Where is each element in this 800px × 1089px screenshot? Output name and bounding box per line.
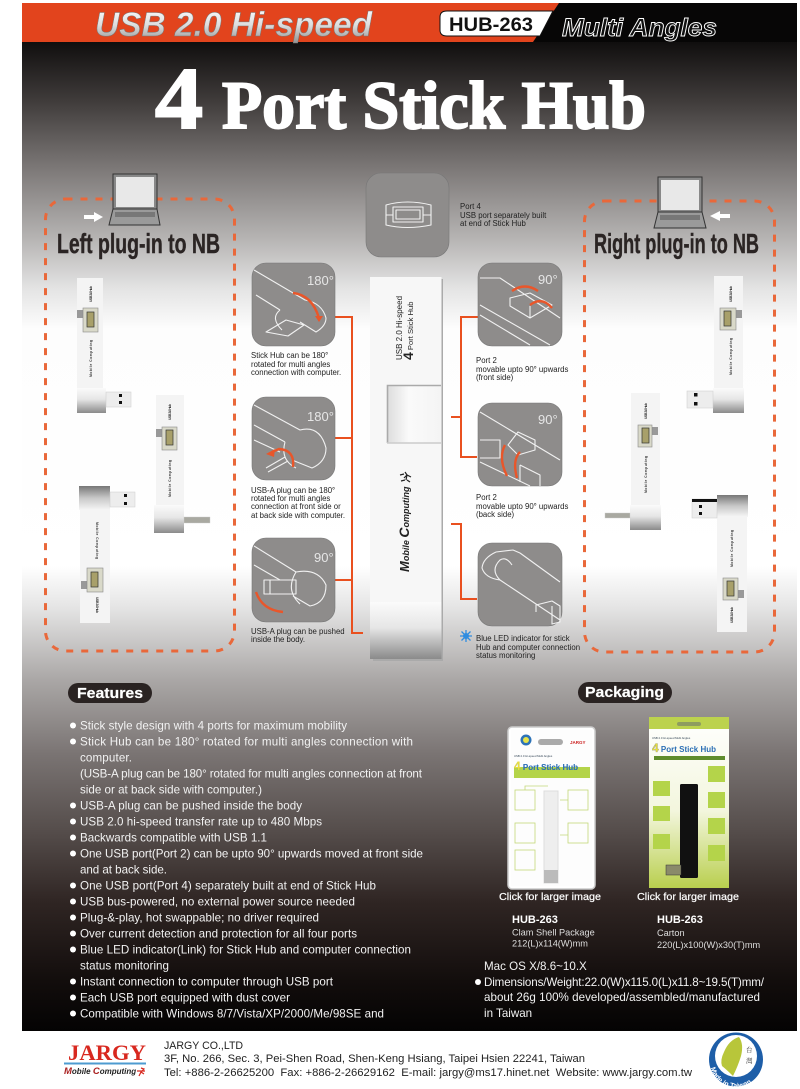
footer logo: Mobile Computing	[64, 1066, 136, 1077]
larger image labels: Click for larger image	[499, 891, 601, 903]
made in Taiwan badge	[709, 1032, 763, 1086]
port 4 caption: at end of Stick Hub	[460, 219, 527, 228]
caption 6: Blue LED indicator for stick	[476, 634, 570, 643]
hub label	[395, 296, 416, 360]
features heading: Features	[77, 685, 143, 702]
caption 2: rotated for multi angles	[251, 494, 330, 503]
caption 1: rotated for multi angles	[251, 360, 330, 369]
clam shell info: 212(L)x114(W)mm	[512, 938, 588, 948]
features list: and at back side.	[80, 864, 167, 876]
callout: LED indicator	[460, 543, 580, 660]
carton package: USB 2.0 Hi-speed Multi Angles	[652, 736, 691, 740]
made in Taiwan badge: 灣	[746, 1056, 753, 1065]
made in Taiwan badge: 台	[746, 1045, 753, 1054]
features list: Over current detection and protection for all four ports	[80, 928, 357, 940]
port 4 caption: USB port separately built	[460, 211, 547, 220]
hub view 5: USB 2.0 Hub	[644, 403, 648, 419]
hub view 3: Mobile Computing	[95, 522, 99, 559]
carton package	[649, 717, 729, 888]
model badge: HUB-263	[449, 15, 533, 36]
carton info	[657, 914, 760, 950]
company details: JARGY CO.,LTD	[164, 1040, 243, 1052]
caption 1: Stick Hub can be 180°	[251, 351, 328, 360]
carton info: HUB-263	[657, 914, 703, 926]
90 degree label: 90°	[314, 550, 334, 565]
company details: 3F, No. 266, Sec. 3, Pei-Shen Road, Shen-Keng Hsiang, Taipei Hsien 22241, Taiwan	[164, 1053, 585, 1065]
caption 2: connection at front side or	[251, 502, 341, 511]
callout: port 2 back	[476, 403, 569, 519]
footer logo: JARGY	[68, 1040, 146, 1065]
caption 4: Port 2	[476, 356, 497, 365]
caption 4: movable upto 90° upwards	[476, 365, 569, 374]
caption 1: connection with computer.	[251, 368, 341, 377]
clam shell package	[508, 727, 595, 889]
company details	[164, 1040, 692, 1079]
features list: Blue LED indicator(Link) for Stick Hub and computer connection	[80, 944, 411, 956]
specs text: Mac OS X/8.6~10.X	[484, 960, 587, 973]
caption 5: movable upto 90° upwards	[476, 502, 569, 511]
larger image labels	[499, 891, 739, 903]
90 degree label: 90°	[538, 272, 558, 287]
hub view 6	[692, 495, 748, 632]
callout: port 2 front	[476, 263, 569, 382]
diagram 4	[480, 278, 560, 345]
main title	[155, 51, 646, 148]
features list: One USB port(Port 2) can be upto 90° upwards moved at front side	[80, 848, 423, 860]
hub label: USB 2.0 Hi-speed	[395, 296, 404, 360]
panel: left plug-in	[46, 174, 234, 651]
features list: computer.	[80, 752, 132, 764]
features list: side or at back side with computer.)	[80, 784, 262, 796]
features list: USB-A plug can be pushed inside the body	[80, 800, 302, 812]
icon: blue LED	[460, 630, 472, 642]
features list	[70, 720, 423, 1020]
callout: USB-A push	[251, 538, 345, 644]
clam shell package: JARGY	[570, 740, 586, 745]
callout: stick hub rotation	[251, 263, 341, 377]
hub view 1: Mobile Computing	[89, 340, 93, 377]
hub label: 4 Port Stick Hub	[400, 302, 416, 360]
main title: 4	[155, 51, 203, 148]
connectors right	[451, 317, 478, 599]
caption 6: status monitoring	[476, 651, 535, 660]
diagram 5	[480, 412, 560, 486]
features list: One USB port(Port 4) separately built at end of Stick Hub	[80, 880, 376, 892]
caption 5: (back side)	[476, 510, 515, 519]
clam shell package: 4 Port Stick Hub	[514, 759, 578, 773]
clam shell package: USB 2.0 Hi-speed Multi Angles	[514, 754, 553, 758]
callout: USB-A rotation	[251, 397, 345, 520]
features list: USB 2.0 hi-speed transfer rate up to 480 Mbps	[80, 816, 322, 828]
caption 3: USB-A plug can be pushed	[251, 627, 345, 636]
features list: Backwards compatible with USB 1.1	[80, 832, 267, 844]
icon: port 4	[386, 202, 431, 228]
panel: port 4 detail	[366, 173, 547, 257]
carton info: 220(L)x100(W)x30(T)mm	[657, 940, 760, 950]
header title: USB 2.0 Hi-speed	[95, 6, 373, 44]
caption 3: inside the body.	[251, 635, 305, 644]
features list: Instant connection to computer through USB port	[80, 976, 334, 988]
specs text: Dimensions/Weight:22.0(W)x115.0(L)x11.8~19.5(T)mm/	[484, 976, 765, 989]
packaging heading: Packaging	[585, 684, 664, 701]
port 4 caption: Port 4	[460, 202, 481, 211]
panel: right plug-in	[584, 177, 774, 652]
caption 2: at back side with computer.	[251, 511, 345, 520]
features heading	[68, 683, 152, 703]
header band	[22, 3, 797, 44]
hub view 5	[605, 393, 661, 530]
features list: Plug-&-play, hot swappable; no driver required	[80, 912, 319, 924]
hub view 3	[79, 486, 135, 623]
footer logo	[64, 1040, 146, 1077]
clam shell info: Clam Shell Package	[512, 928, 595, 938]
features list: USB bus-powered, no external power source needed	[80, 896, 355, 908]
features list: Compatible with Windows 8/7/Vista/XP/2000/Me/98SE and	[80, 1008, 384, 1020]
carton package: 4 Port Stick Hub	[652, 741, 716, 755]
hub view 2	[154, 395, 210, 533]
clam shell info	[512, 914, 595, 948]
main title: Port Stick Hub	[222, 67, 646, 143]
specs text: in Taiwan	[484, 1007, 532, 1020]
diagram 6	[482, 550, 560, 624]
hub view 2: USB 2.0 Hub	[168, 404, 172, 420]
hub view 2: Mobile Computing	[168, 460, 172, 497]
connectors left	[335, 317, 363, 633]
specs text	[475, 960, 765, 1020]
caption 6: Hub and computer connection	[476, 643, 580, 652]
company details: Tel: +886-2-26625200 Fax: +886-2-26629162 E-mail: jargy@ms17.hinet.net Website: www.jargy.com.tw	[164, 1067, 692, 1079]
diagram 1	[254, 270, 326, 336]
hub view 4	[687, 276, 744, 413]
specs text: about 26g 100% developed/assembled/manufactured	[484, 991, 760, 1004]
90 degree label: 90°	[538, 412, 558, 427]
hub view 5: Mobile Computing	[644, 456, 648, 493]
caption 4: (front side)	[476, 373, 514, 382]
carton info: Carton	[657, 928, 685, 938]
clam shell info: HUB-263	[512, 914, 558, 926]
icon: right arrow	[710, 211, 730, 221]
hub view 4: USB 2.0 Hub	[729, 286, 733, 302]
hub view 6: Mobile Computing	[730, 530, 734, 567]
caption 2: USB-A plug can be 180°	[251, 486, 335, 495]
features list: (USB-A plug can be 180° rotated for multi angles connection at front	[80, 768, 423, 780]
180 degree label: 180°	[307, 409, 334, 424]
left heading: Left plug-in to NB	[57, 228, 220, 259]
hub view 4: Mobile Computing	[729, 338, 733, 375]
features list: Each USB port equipped with dust cover	[80, 992, 290, 1004]
icon: right laptop	[654, 177, 706, 228]
hub view 3: USB 2.0 Hub	[95, 597, 99, 613]
icon: left laptop	[109, 174, 160, 225]
diagram 2	[254, 405, 326, 472]
packaging heading	[578, 682, 672, 703]
icon: left arrow	[84, 212, 103, 222]
hub view 6: USB 2.0 Hub	[730, 607, 734, 623]
larger image labels: Click for larger image	[637, 891, 739, 903]
diagram 3	[254, 546, 326, 612]
hub view 1: USB 2.0 Hub	[89, 286, 93, 302]
180 degree label: 180°	[307, 273, 334, 288]
caption 5: Port 2	[476, 493, 497, 502]
features list: Stick style design with 4 ports for maximum mobility	[80, 720, 347, 732]
features list: Stick Hub can be 180° rotated for multi angles connection with	[80, 736, 413, 748]
model badge	[440, 11, 553, 36]
features list: status monitoring	[80, 960, 169, 972]
hub brand: Mobile Computing	[396, 486, 412, 572]
hub view 1	[77, 278, 131, 413]
multi angles label: Multi Angles	[562, 14, 717, 42]
center stick hub	[370, 277, 443, 661]
